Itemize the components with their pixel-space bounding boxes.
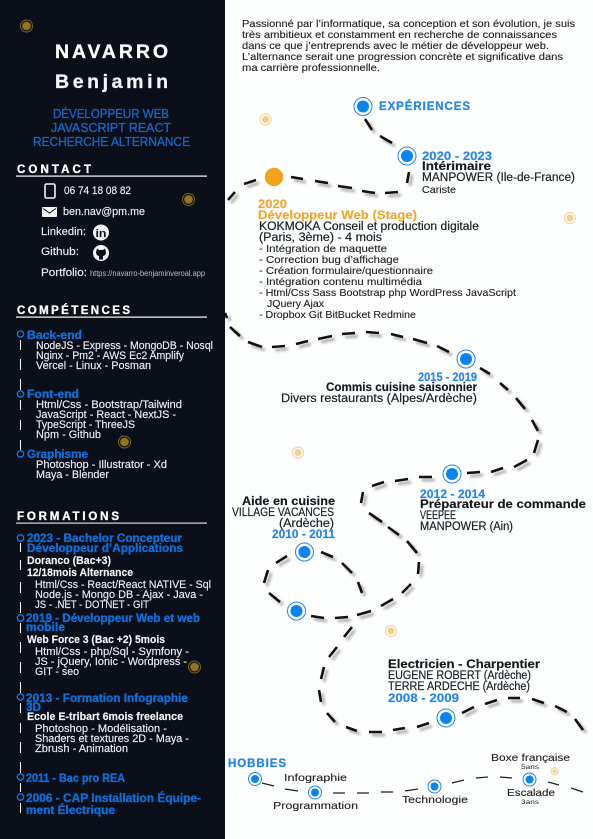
name heading: NAVARRO [55, 41, 168, 63]
panel: compétences: Nginx - Pm2 - AWS Ec2 Amplify [36, 350, 184, 362]
experience: développeur web stage: - Html/Css Sass Bootstrap php WordPress JavaScript [259, 287, 516, 299]
experience: aide en cuisine: (Ardèche) [279, 518, 334, 530]
icon: phone [45, 184, 55, 198]
hobbies nodes [248, 772, 536, 799]
panel: formations: Doranco (Bac+3) [27, 555, 111, 567]
experience: développeur web stage: JQuery Ajax [267, 298, 325, 310]
panel: formations: 3D [26, 700, 41, 714]
panel: formations: Ecole E-tribart 6mois freelance [27, 711, 183, 723]
panel: compétences: Graphisme [27, 447, 88, 461]
name heading [55, 41, 168, 93]
icon: linkedin [93, 224, 109, 240]
icon: linkedin: in [96, 228, 107, 240]
panel: formations: Photoshop - Modélisation - [35, 723, 167, 735]
panel: formations: mobile [26, 620, 65, 634]
panel: formations: FORMATIONS [17, 511, 119, 523]
experience: intérimaire: 2020 - 2023 [422, 149, 492, 163]
panel: formations: 2023 - Bachelor Concepteur [27, 531, 182, 545]
panel: compétences: Vercel - Linux - Posman [36, 360, 151, 372]
panel: contact: CONTACT [17, 164, 91, 176]
panel: formations: Web Force 3 (Bac +2) 5mois [27, 634, 165, 646]
panel: formations: Node.js - Mongo DB - Ajax - Java - [35, 589, 203, 601]
experience: développeur web stage: - Correction bug d’affichage [259, 254, 399, 266]
panel: formations: Zbrush - Animation [35, 743, 128, 755]
panel: contact: Portfolio: [41, 267, 87, 279]
panel: compétences: NodeJS - Express - MongoDB - Nosql [36, 340, 213, 352]
timeline nodes [288, 98, 475, 727]
experience: préparateur de commande: Préparateur de commande [420, 497, 586, 511]
experience: développeur web stage: (Paris, 3ème) - 4 mois [259, 232, 382, 244]
timeline: dashed road [225, 119, 586, 735]
experience: électricien: Electricien - Charpentier [388, 657, 540, 671]
skill timeline [17, 331, 24, 457]
panel: hobbies: Boxe française [491, 752, 570, 764]
panel: hobbies: Escalade [507, 787, 555, 799]
experience: commis cuisine: Commis cuisine saisonnier [326, 380, 477, 394]
intro text: L’alternance serait une progression concrète et significative dans [242, 51, 563, 63]
intro text [242, 18, 575, 74]
experience: développeur web stage: - Dropbox Git BitBucket Redmine [259, 309, 416, 321]
experience: électricien: 2008 - 2009 [388, 691, 459, 705]
panel: compétences: TypeScript - ThreeJS [36, 419, 135, 431]
panel: formations: GIT - seo [35, 666, 79, 678]
experience: développeur web stage: - Intégration contenu multimédia [259, 276, 422, 288]
formation timeline [17, 535, 24, 813]
panel: hobbies: Programmation [273, 800, 358, 812]
experience: développeur web stage: 2020 [258, 197, 287, 211]
panel: compétences: Npm - Github [36, 429, 101, 441]
experience: intérimaire: Cariste [422, 184, 456, 196]
panel: hobbies [228, 752, 583, 812]
experience: développeur web stage: Développeur Web (Stage) [258, 208, 417, 222]
experience: développeur web stage: KOKMOKA Conseil et production digitale [259, 221, 479, 233]
icon: mail [42, 207, 57, 217]
experience: commis cuisine [281, 370, 477, 405]
panel: contact: 06 74 18 08 82 [64, 185, 131, 197]
experience: aide en cuisine: 2010 - 2011 [272, 527, 335, 541]
panel: sidebar [0, 0, 225, 839]
intro text: ma carrière professionnelle. [242, 62, 380, 74]
experience: intérimaire: Intérimaire [422, 159, 491, 173]
panel: compétences: Photoshop - Illustrator - Xd [36, 459, 167, 471]
panel: hobbies: Infographie [284, 772, 347, 784]
panel: compétences: Html/Css - Bootstrap/Tailwind [36, 399, 182, 411]
experience: aide en cuisine: VILLAGE VACANCES [232, 507, 334, 519]
experience: commis cuisine: Divers restaurants (Alpes/Ardèche) [281, 393, 477, 405]
experience: intérimaire: MANPOWER (Ile-de-France) [422, 172, 575, 184]
experience: préparateur de commande [420, 487, 586, 533]
panel: formations: Shaders et textures 2D - Maya - [35, 733, 189, 745]
experience: électricien [388, 657, 540, 705]
panel: contact: https://navarro-benjaminveroal.app [90, 269, 206, 278]
panel: compétences: Back-end [27, 328, 82, 342]
job title [33, 106, 190, 149]
hobbies line [262, 777, 583, 793]
job title: JAVASCRIPT REACT [51, 121, 171, 135]
experience: préparateur de commande: VEEPEE [420, 510, 456, 522]
name heading: Benjamin [55, 71, 168, 93]
experience: développeur web stage [258, 197, 516, 321]
intro text: Passionné par l’informatique, sa conception et son évolution, je suis [242, 18, 575, 30]
panel: contact: Linkedin: [41, 226, 86, 238]
experience: commis cuisine: 2015 - 2019 [418, 370, 477, 384]
panel: hobbies: 5ans [521, 764, 540, 771]
panel: formations: ment Électrique [26, 802, 115, 817]
panel: formations: Développeur d’Applications [27, 541, 183, 555]
panel: contact: ben.nav@pm.me [63, 206, 145, 218]
panel: compétences: COMPÉTENCES [17, 304, 130, 317]
experience: préparateur de commande: 2012 - 2014 [420, 487, 485, 501]
experience: développeur web stage: - Création formulaire/questionnaire [259, 265, 433, 277]
panel: formations: 2006 - CAP Installation Équipe- [26, 790, 201, 805]
experiences heading: EXPÉRIENCES [379, 100, 470, 113]
experience: aide en cuisine [232, 494, 335, 541]
experience: développeur web stage: - Intégration de maquette [259, 243, 387, 255]
experience: électricien: TERRE ARDECHE (Ardèche) [388, 681, 530, 693]
panel: formations: JS - jQuery, Ionic - Wordpress - [35, 656, 187, 668]
intro text: très ambitieux et constamment en recherche de connaissances [242, 29, 557, 41]
icon: github [93, 245, 109, 261]
panel: formations: 2013 - Formation Infographie [26, 691, 188, 705]
orange stage marker [265, 168, 283, 186]
panel: compétences: Font-end [27, 387, 79, 401]
panel: formations: Html/Css - php/Sql - Symfony - [35, 646, 189, 658]
panel: compétences [16, 304, 213, 481]
job title: DÉVELOPPEUR WEB [53, 106, 169, 121]
panel: hobbies: HOBBIES [228, 758, 286, 770]
panel: hobbies: 3ans [521, 799, 540, 806]
panel: contact [16, 164, 207, 279]
panel: formations: 2019 - Développeur Web et web [26, 611, 200, 625]
panel: formations [16, 511, 211, 817]
panel: compétences: Maya - Blender [36, 469, 109, 481]
intro text: dans ce que j’entreprends avec le métier de développeur web. [242, 40, 549, 52]
experience: électricien: EUGENE ROBERT (Ardèche) [388, 670, 531, 682]
panel: compétences: JavaScript - React - NextJS - [36, 409, 176, 421]
experience: aide en cuisine: Aide en cuisine [242, 494, 335, 508]
panel: formations: Html/Css - React/React NATIVE - Sql [35, 579, 211, 591]
job title: RECHERCHE ALTERNANCE [33, 135, 190, 149]
experience: préparateur de commande: MANPOWER (Ain) [420, 521, 513, 533]
panel: formations: 12/18mois Alternance [27, 567, 133, 579]
experience: intérimaire [422, 149, 575, 196]
panel: formations: 2011 - Bac pro REA [26, 771, 125, 785]
panel: formations: JS - .NET - DOTNET - GIT [35, 599, 149, 611]
panel: hobbies: Technologie [402, 794, 468, 806]
panel: contact: Github: [41, 246, 79, 258]
